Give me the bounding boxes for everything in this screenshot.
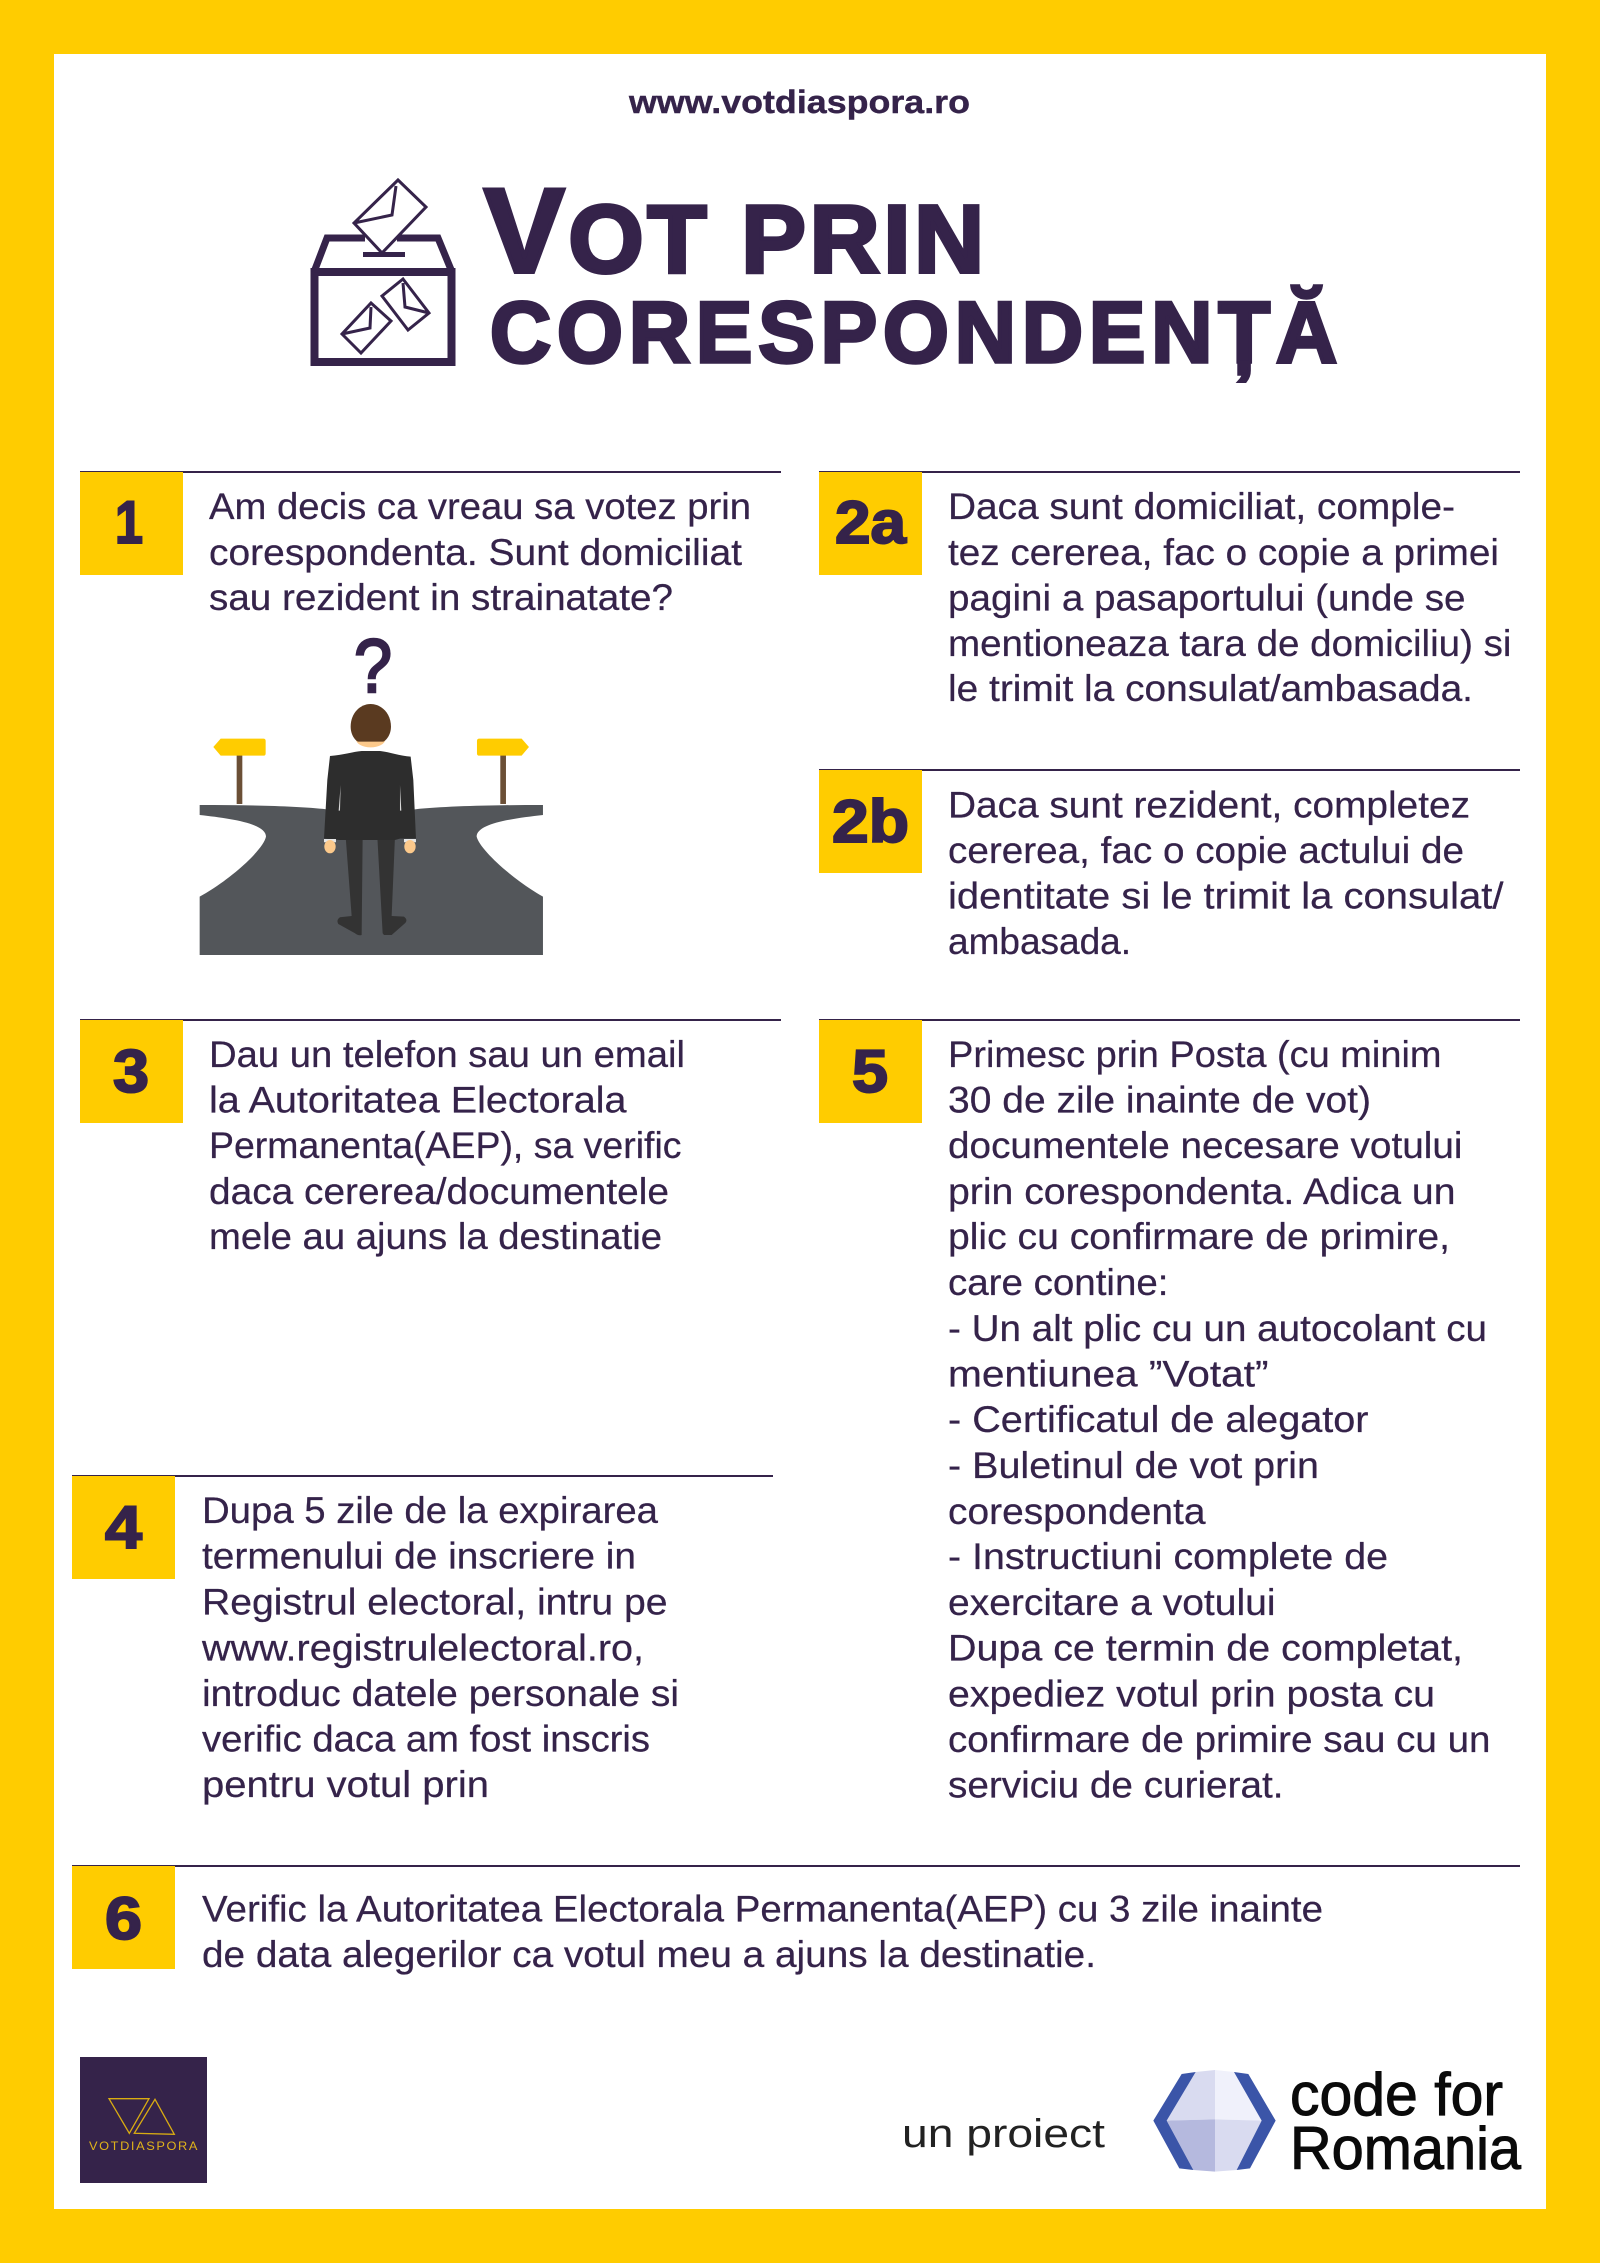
panel: step 3	[80, 1019, 781, 1257]
text: step 1: sau rezident in strainatate?	[209, 577, 673, 618]
text: step 5: Dupa ce termin de completat,	[948, 1628, 1463, 1669]
logo: Code for Romania: code for	[1290, 2061, 1503, 2128]
text: step 4: Registrul electoral, intru pe	[202, 1582, 668, 1622]
text: step 5: - Un alt plic cu un autocolant cu	[948, 1308, 1487, 1349]
text: step 5: - Buletinul de vot prin	[948, 1445, 1319, 1486]
text: step 5: corespondenta	[948, 1491, 1206, 1532]
step number 6: 6	[105, 1885, 142, 1952]
title	[484, 164, 1343, 381]
text: step 4: termenului de inscriere in	[202, 1536, 636, 1577]
text: step 5: care contine:	[948, 1262, 1168, 1303]
text: step 5: serviciu de curierat.	[948, 1765, 1284, 1806]
text: step 2b: Daca sunt rezident, completez	[948, 784, 1470, 826]
text: step 4: pentru votul prin	[202, 1764, 489, 1805]
text: step 4	[201, 1490, 679, 1805]
text: step 1: corespondenta. Sunt domiciliat	[209, 532, 743, 573]
step number 3: 3	[113, 1038, 149, 1105]
title: CORESPONDENȚĂ	[490, 285, 1343, 381]
illustration: man at a crossroads: ?	[354, 624, 392, 709]
step number 2a	[819, 472, 922, 575]
text: step 4: Dupa 5 zile de la expirarea	[202, 1490, 658, 1531]
text: step 2a: Daca sunt domiciliat, comple-	[948, 486, 1455, 527]
logo: Votdiaspora	[80, 2057, 207, 2183]
step number 4	[72, 1476, 175, 1579]
text: step 2a: pagini a pasaportului (unde se	[948, 578, 1466, 618]
panel: step 6	[72, 1865, 1520, 1975]
text: step 2b	[948, 784, 1504, 962]
text: step 5	[948, 1034, 1490, 1806]
label: un proiect: un proiect	[902, 2112, 1105, 2156]
text: step 2b: cererea, fac o copie actului de	[948, 830, 1464, 871]
text: step 3: la Autoritatea Electorala	[209, 1080, 627, 1121]
step number 6	[72, 1866, 175, 1969]
text: step 5: prin corespondenta. Adica un	[948, 1171, 1456, 1212]
text: step 4: introduc datele personale si	[202, 1673, 679, 1714]
text: step 3	[209, 1034, 685, 1257]
text: step 5: expediez votul prin posta cu	[948, 1674, 1435, 1715]
text: step 3: Dau un telefon sau un email	[209, 1034, 685, 1075]
logo: Votdiaspora: VOTDIASPORA	[89, 2139, 199, 2153]
text: step 5: mentiunea ”Votat”	[948, 1354, 1268, 1395]
panel: step 1	[80, 471, 781, 955]
step number 2b	[819, 770, 922, 873]
step number 1: 1	[115, 489, 143, 556]
text: step 5: Primesc prin Posta (cu minim	[948, 1034, 1442, 1075]
text: step 3: mele au ajuns la destinatie	[209, 1216, 662, 1257]
text: step 2a	[948, 486, 1512, 709]
panel: step 5	[819, 1019, 1520, 1806]
text: step 5: confirmare de primire sau cu un	[948, 1719, 1490, 1760]
website url: www.votdiaspora.ro	[628, 84, 970, 120]
title: VOT PRIN	[484, 164, 988, 298]
text: step 2a: le trimit la consulat/ambasada.	[948, 668, 1473, 709]
text: step 6: Verific la Autoritatea Electorala Permanenta(AEP) cu 3 zile inainte	[202, 1889, 1323, 1930]
step number 1	[80, 472, 183, 575]
text: step 4: www.registrulelectoral.ro,	[201, 1628, 644, 1668]
text: step 2a: mentioneaza tara de domiciliu) si	[948, 623, 1512, 664]
text: step 5: - Certificatul de alegator	[948, 1399, 1368, 1440]
panel: step 4	[72, 1475, 773, 1805]
text: step 5: documentele necesare votului	[948, 1125, 1462, 1166]
step number 4: 4	[105, 1494, 143, 1561]
text: step 5: 30 de zile inainte de vot)	[948, 1080, 1371, 1121]
step number 2a: 2a	[835, 489, 907, 556]
icon: ballot box with envelopes	[314, 180, 452, 362]
text: step 1	[209, 486, 751, 618]
text: step 5: plic cu confirmare de primire,	[948, 1216, 1450, 1257]
text: step 5: exercitare a votului	[948, 1582, 1276, 1623]
text: step 2b: identitate si le trimit la consulat/	[948, 876, 1504, 916]
logo: Code for Romania: Romania	[1290, 2115, 1522, 2182]
panel: step 2b	[819, 769, 1520, 962]
text: step 6	[202, 1889, 1323, 1975]
illustration: man at a crossroads	[200, 624, 543, 955]
text: step 5: - Instructiuni complete de	[948, 1536, 1388, 1577]
step number 5	[819, 1020, 922, 1123]
step number 2b: 2b	[832, 788, 909, 855]
step number 3	[80, 1020, 183, 1123]
text: step 2b: ambasada.	[948, 921, 1131, 962]
text: step 3: Permanenta(AEP), sa verific	[209, 1125, 682, 1166]
logo: Code for Romania	[1153, 2061, 1522, 2182]
text: step 2a: tez cererea, fac o copie a primei	[948, 532, 1499, 573]
step number 5: 5	[852, 1038, 888, 1105]
text: step 3: daca cererea/documentele	[209, 1171, 669, 1212]
text: step 6: de data alegerilor ca votul meu a ajuns la destinatie.	[202, 1934, 1096, 1975]
panel: step 2a	[819, 471, 1520, 709]
text: step 4: verific daca am fost inscris	[202, 1719, 650, 1760]
text: step 1: Am decis ca vreau sa votez prin	[209, 486, 751, 527]
